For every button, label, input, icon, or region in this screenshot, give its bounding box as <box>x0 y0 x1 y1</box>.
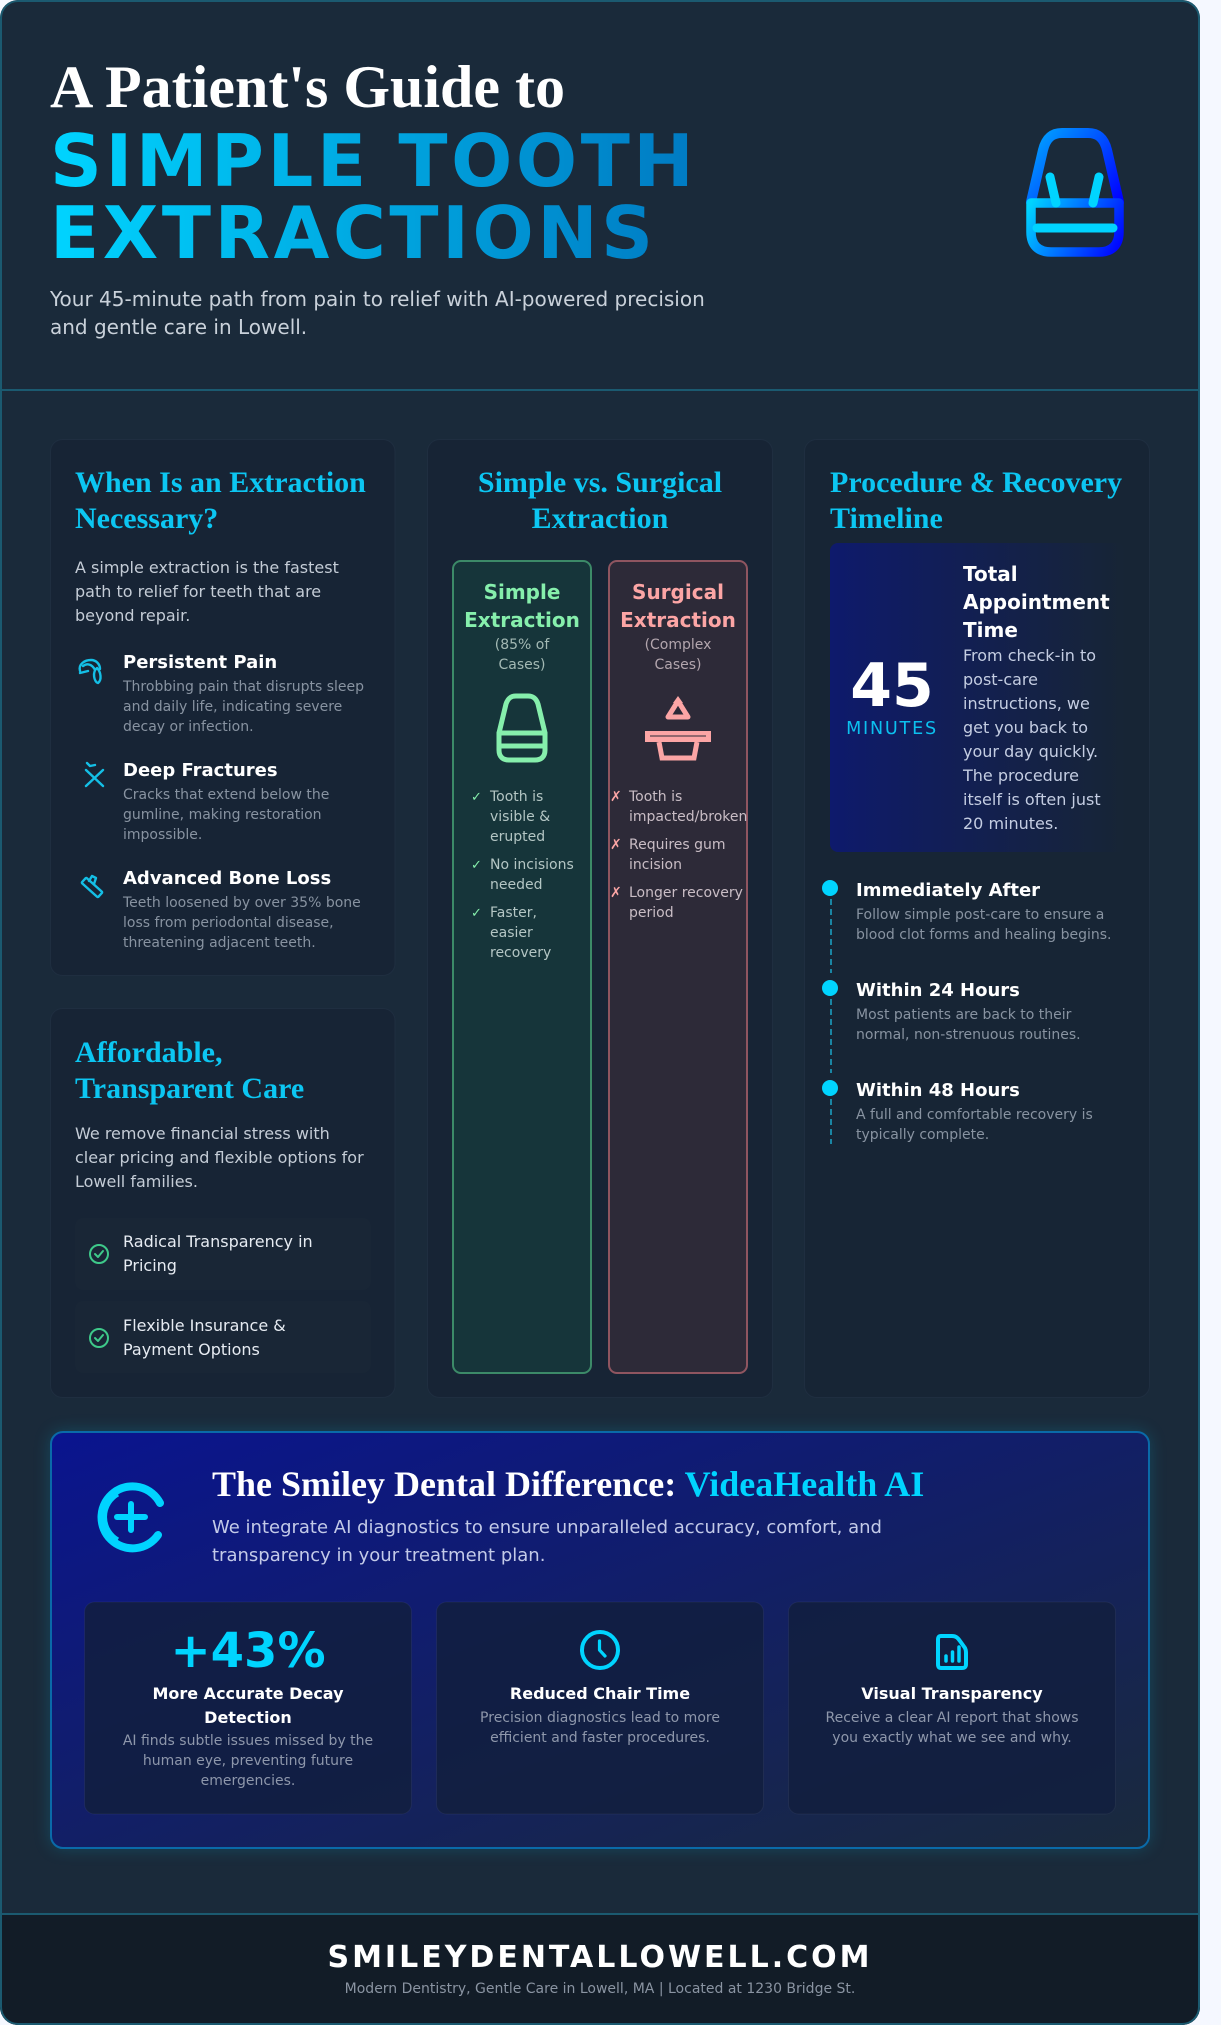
panel: simple vs surgical <box>428 440 772 1398</box>
item: persistent pain <box>80 652 364 735</box>
intro text: Lowell families. <box>75 1172 198 1191</box>
item: advanced bone loss: loss from periodontal disease, <box>123 915 334 931</box>
card: visual transparency: Visual Transparency <box>861 1684 1043 1703</box>
card: reduced chair time: efficient and faster procedures. <box>490 1730 710 1746</box>
card: visual transparency <box>788 1602 1116 1814</box>
item: deep fractures <box>86 760 329 843</box>
item: persistent pain: Throbbing pain that disrupts sleep <box>122 679 364 695</box>
panel: procedure and recovery timeline <box>804 440 1150 1398</box>
item: advanced bone loss <box>81 868 361 951</box>
row: flexible insurance: Flexible Insurance & <box>123 1316 286 1335</box>
checklist: ✓ <box>471 906 482 921</box>
heading: Simple vs. Surgical <box>478 466 722 499</box>
callout: total appointment time: Appointment <box>963 590 1110 614</box>
column: surgical extraction: (Complex <box>645 637 711 653</box>
icon: simple tooth <box>499 696 545 760</box>
timeline step: within 24 hours: normal, non-strenuous routines. <box>856 1027 1081 1043</box>
callout: total appointment time: post-care <box>963 670 1038 689</box>
timeline step: within 48 hours: typically complete. <box>856 1127 989 1143</box>
row: radical transparency: Pricing <box>123 1256 177 1275</box>
checklist <box>471 789 574 961</box>
callout: total appointment time: From check-in to <box>963 646 1096 665</box>
card: reduced chair time <box>436 1602 764 1814</box>
header <box>49 54 1119 339</box>
row: radical transparency <box>75 1218 371 1290</box>
card: accuracy stat: emergencies. <box>201 1773 295 1789</box>
row: radical transparency: Radical Transparency in <box>123 1232 313 1251</box>
card: accuracy stat: More Accurate Decay <box>152 1684 344 1703</box>
item: persistent pain: decay or infection. <box>123 719 254 735</box>
heading <box>830 466 1122 535</box>
column: surgical extraction: Extraction <box>620 608 736 632</box>
callout: total appointment time: 45 <box>850 651 934 721</box>
callout: total appointment time: your day quickly. <box>963 742 1098 761</box>
card: reduced chair time: Reduced Chair Time <box>510 1684 690 1703</box>
footer: Modern Dentistry, Gentle Care in Lowell, MA | Located at 1230 Bridge St. <box>345 1981 855 1997</box>
title: Simple Tooth Extractions: EXTRACTIONS <box>50 191 657 275</box>
card: accuracy stat: AI finds subtle issues missed by the <box>123 1733 373 1749</box>
icon: AI plus <box>102 1486 160 1548</box>
heading: Affordable, <box>75 1036 222 1069</box>
panel: the smiley dental difference <box>51 1432 1149 1848</box>
heading: When Is an Extraction <box>75 466 366 499</box>
card: visual transparency: Receive a clear AI report that shows <box>826 1710 1078 1726</box>
intro text <box>75 558 339 625</box>
card: reduced chair time: Precision diagnostics lead to more <box>480 1710 720 1726</box>
item: advanced bone loss: threatening adjacent teeth. <box>123 935 316 951</box>
checklist: easier <box>490 925 533 941</box>
checklist: Tooth is <box>489 789 543 805</box>
timeline step: immediately after: Follow simple post-care to ensure a <box>856 907 1104 923</box>
item: persistent pain: Persistent Pain <box>123 652 277 673</box>
checklist: recovery <box>490 945 551 961</box>
footer: SMILEYDENTALLOWELL.COM <box>327 1940 873 1975</box>
heading: Extraction <box>532 502 669 535</box>
checklist: ✓ <box>471 790 482 805</box>
column: simple extraction: Cases) <box>498 657 546 673</box>
timeline step: within 48 hours <box>822 1080 1093 1144</box>
cross list: period <box>629 905 674 921</box>
checklist: ✓ <box>471 858 482 873</box>
subtitle: and gentle care in Lowell. <box>50 315 307 339</box>
checklist: visible & <box>490 809 550 825</box>
item: deep fractures: Deep Fractures <box>123 760 278 781</box>
row: flexible insurance: Payment Options <box>123 1340 260 1359</box>
heading: Necessary? <box>75 502 218 535</box>
cross list: Longer recovery <box>629 885 743 901</box>
heading: Procedure & Recovery <box>830 466 1122 499</box>
heading <box>478 466 722 535</box>
panel: affordable care <box>50 1008 395 1398</box>
cross list: ✗ <box>610 885 622 901</box>
column: simple extraction: Extraction <box>464 608 580 632</box>
intro text: clear pricing and flexible options for <box>75 1148 364 1167</box>
column: simple extraction: Simple <box>484 580 560 604</box>
item: persistent pain: and daily life, indicating severe <box>123 699 342 715</box>
icon: bone <box>81 876 103 897</box>
intro text <box>75 1124 364 1191</box>
heading <box>75 1036 304 1105</box>
checklist: needed <box>490 877 542 893</box>
card: visual transparency: you exactly what we see and why. <box>832 1730 1072 1746</box>
heading <box>75 466 366 535</box>
item: deep fractures: impossible. <box>123 827 202 843</box>
icon: check <box>90 1329 108 1347</box>
item: advanced bone loss: Teeth loosened by over 35% bone <box>122 895 361 911</box>
icon: fracture <box>86 763 103 786</box>
timeline step: within 24 hours <box>822 980 1081 1073</box>
column: surgical extraction: Surgical <box>632 580 724 604</box>
timeline step: immediately after <box>822 880 1111 973</box>
heading: The Smiley Dental Difference: VideaHealth AI <box>212 1464 924 1504</box>
title line: A Patient's Guide to: A Patient's Guide to <box>50 54 565 120</box>
card: accuracy stat: +43% <box>170 1623 326 1679</box>
timeline step: immediately after: blood clot forms and healing begins. <box>856 927 1111 943</box>
cross list <box>610 789 747 921</box>
icon: surgical tooth <box>645 696 711 758</box>
heading: Transparent Care <box>75 1072 304 1105</box>
callout: total appointment time: MINUTES <box>846 719 938 739</box>
icon: report document <box>938 1636 966 1668</box>
title: Simple Tooth Extractions <box>50 119 697 275</box>
timeline step: immediately after: Immediately After <box>856 880 1040 901</box>
footer <box>327 1940 873 1997</box>
checklist: Faster, <box>490 905 537 921</box>
icon: tooth <box>1031 133 1119 252</box>
row: flexible insurance <box>75 1301 371 1373</box>
cross list: Tooth is <box>628 789 682 805</box>
cross list: Requires gum <box>629 837 726 853</box>
column: simple extraction: (85% of <box>495 637 550 653</box>
intro text: We integrate AI diagnostics to ensure unparalleled accuracy, comfort, and <box>212 1517 882 1538</box>
checklist: erupted <box>490 829 545 845</box>
timeline step: within 48 hours: Within 48 Hours <box>856 1080 1020 1101</box>
timeline step: within 24 hours: Within 24 Hours <box>856 980 1020 1001</box>
column: surgical extraction <box>609 561 747 1373</box>
item: deep fractures: Cracks that extend below the <box>123 787 329 803</box>
timeline step: within 24 hours: Most patients are back to their <box>856 1007 1072 1023</box>
callout: total appointment time: The procedure <box>962 766 1079 785</box>
icon: pain <box>80 660 101 683</box>
intro text: transparency in your treatment plan. <box>212 1545 545 1566</box>
cross list: ✗ <box>610 837 622 853</box>
title: Simple Tooth Extractions: SIMPLE TOOTH <box>50 119 697 203</box>
callout: total appointment time: 20 minutes. <box>963 814 1058 833</box>
callout: total appointment time: instructions, we <box>963 694 1090 713</box>
column: simple extraction <box>453 561 591 1373</box>
callout: total appointment time <box>830 543 1125 852</box>
subtitle: Your 45-minute path from pain to relief with AI-powered precision <box>49 287 705 311</box>
cross list: impacted/broken <box>629 809 747 825</box>
cross list: ✗ <box>610 789 622 805</box>
card: accuracy stat: Detection <box>204 1708 292 1727</box>
item: advanced bone loss: Advanced Bone Loss <box>123 868 331 889</box>
callout: total appointment time: get you back to <box>963 718 1088 737</box>
callout: total appointment time: Time <box>963 618 1018 642</box>
timeline step: within 48 hours: A full and comfortable recovery is <box>856 1107 1093 1123</box>
item: deep fractures: gumline, making restoration <box>123 807 322 823</box>
icon: clock <box>582 1632 618 1668</box>
column: surgical extraction: Cases) <box>654 657 702 673</box>
cross list: incision <box>629 857 682 873</box>
panel: when is an extraction necessary <box>50 440 395 976</box>
callout: total appointment time: itself is often just <box>963 790 1101 809</box>
icon: check <box>90 1245 108 1263</box>
intro text: beyond repair. <box>75 606 190 625</box>
card: accuracy stat: human eye, preventing future <box>143 1753 353 1769</box>
intro text: We remove financial stress with <box>75 1124 330 1143</box>
card: accuracy stat <box>84 1602 412 1814</box>
heading: Timeline <box>830 502 943 535</box>
checklist: No incisions <box>490 857 574 873</box>
subtitle <box>49 287 705 339</box>
intro text: path to relief for teeth that are <box>75 582 321 601</box>
callout: total appointment time: Total <box>963 562 1018 586</box>
intro text <box>212 1517 882 1566</box>
intro text: A simple extraction is the fastest <box>75 558 339 577</box>
